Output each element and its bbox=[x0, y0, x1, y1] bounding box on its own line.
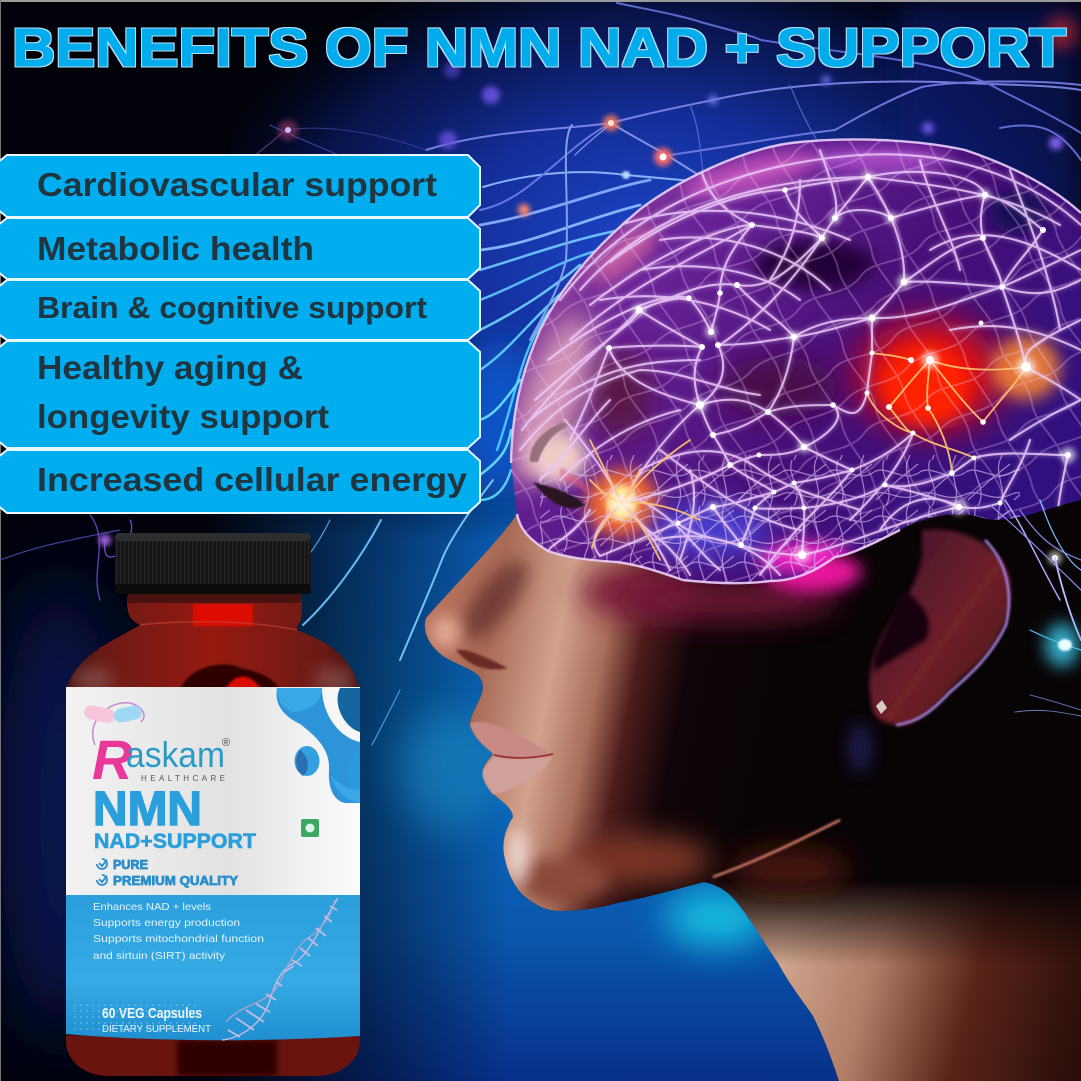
background glowing dots bbox=[99, 62, 1063, 546]
face and neck skin silhouette bbox=[425, 480, 1081, 1081]
logo: Raskam Healthcare: askam bbox=[126, 734, 225, 775]
brain colour glows bbox=[755, 241, 875, 289]
logo: Raskam Healthcare: ® bbox=[222, 737, 230, 749]
dietary supplement text: DIETARY SUPPLEMENT bbox=[102, 1023, 212, 1035]
benefit: metabolic health bbox=[0, 218, 480, 279]
bottle cap bbox=[115, 533, 311, 603]
ear bbox=[870, 529, 1011, 725]
label decorative blobs bbox=[276, 688, 360, 803]
product name: NMN bbox=[93, 783, 202, 836]
logo: Raskam Healthcare: R bbox=[92, 728, 133, 791]
benefit: cardiovascular support bbox=[0, 155, 480, 217]
brain outline bbox=[511, 139, 1081, 583]
ear rim glow bbox=[896, 540, 1009, 725]
glowing brain network bbox=[493, 139, 1081, 585]
label benefits text bbox=[93, 901, 264, 962]
panel: benefits list bbox=[0, 155, 480, 513]
benefit: healthy aging and longevity bbox=[0, 341, 480, 448]
background neural lines bbox=[0, 3, 1081, 745]
title: BENEFITS OF NMN NAD + SUPPORT bbox=[12, 18, 1066, 78]
earring bbox=[876, 700, 887, 714]
neck light bbox=[714, 884, 1081, 1081]
benefit: brain and cognitive support bbox=[0, 280, 480, 340]
veg mark bbox=[301, 819, 319, 837]
neural fibres bbox=[520, 150, 1081, 575]
bottle glass bbox=[66, 600, 360, 1076]
benefit: brain and cognitive support: Brain & cognitive support bbox=[37, 290, 427, 325]
benefit: metabolic health: Metabolic health bbox=[37, 230, 314, 267]
blue label area bbox=[66, 895, 360, 1040]
skin lighting bbox=[420, 500, 1081, 1081]
label benefits text: Supports mitochondrial function bbox=[93, 933, 264, 945]
check icon: pure bbox=[97, 859, 107, 869]
brain base bbox=[511, 139, 1081, 583]
inner ear bbox=[874, 590, 929, 672]
quality claims: PREMIUM QUALITY bbox=[113, 873, 238, 888]
label benefits text: and sirtuin (SIRT) activity bbox=[93, 950, 226, 962]
benefit: healthy aging and longevity: longevity support bbox=[37, 398, 329, 435]
product bottle bbox=[66, 533, 360, 1076]
benefit: cardiovascular support: Cardiovascular support bbox=[37, 166, 437, 203]
label dot pattern bbox=[70, 1000, 200, 1032]
neural nodes bbox=[606, 174, 1071, 561]
check icon: premium bbox=[97, 875, 107, 885]
fine web texture, whole brain bbox=[511, 140, 1081, 585]
nose shadow bbox=[456, 650, 508, 669]
product subtitle: NAD+SUPPORT bbox=[94, 830, 256, 853]
icon: DNA helix bbox=[222, 898, 338, 1040]
neural node glow bbox=[613, 171, 1076, 565]
benefit: increased cellular energy bbox=[0, 450, 480, 513]
woman's profile head bbox=[420, 480, 1081, 1081]
quality claims bbox=[97, 857, 238, 888]
eye and lashes bbox=[533, 482, 585, 508]
logo: Raskam Healthcare bbox=[83, 703, 230, 791]
fibre glow bbox=[520, 150, 1081, 575]
lower lip bbox=[483, 756, 552, 794]
benefit: healthy aging and longevity: Healthy aging & bbox=[37, 349, 303, 386]
mouth line bbox=[494, 754, 553, 758]
eyebrow bbox=[530, 420, 585, 462]
upper lip bbox=[470, 722, 553, 757]
label benefits text: Supports energy production bbox=[93, 917, 240, 929]
benefit: increased cellular energy: Increased cellular energy bbox=[37, 461, 468, 498]
quality claims: PURE bbox=[113, 857, 148, 872]
capacity text: 60 VEG Capsules bbox=[102, 1006, 202, 1022]
fine web texture, lower brain bbox=[540, 455, 1020, 585]
logo: Raskam Healthcare: HEALTHCARE bbox=[141, 774, 225, 783]
right side fine lines and star bbox=[990, 500, 1081, 716]
label benefits text: Enhances NAD + levels bbox=[93, 901, 211, 913]
white label area bbox=[66, 687, 360, 896]
hot red fibres bbox=[590, 353, 1026, 560]
eyelid bbox=[560, 468, 595, 500]
